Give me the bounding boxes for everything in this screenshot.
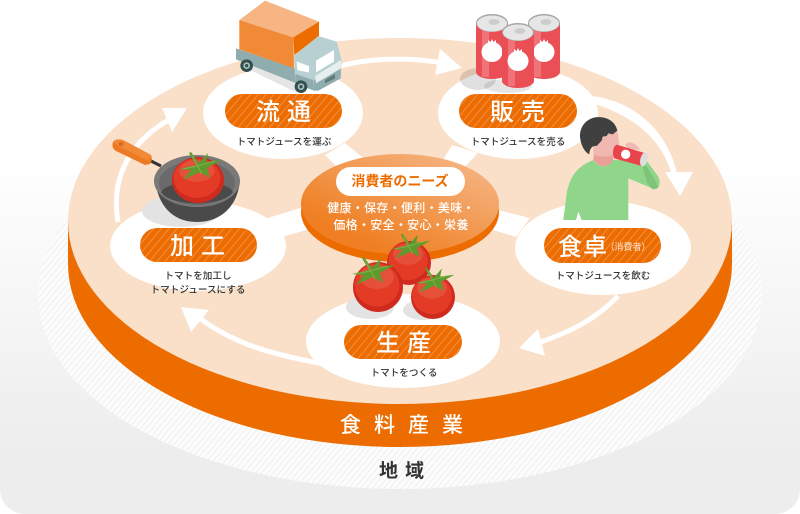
caption: dining table: トマトジュースを飲む xyxy=(556,270,650,282)
pill: distribution xyxy=(225,94,342,128)
center disc: consumer needs xyxy=(301,154,499,262)
arrow: retail to dining table xyxy=(593,96,693,196)
caption: production: トマトをつくる xyxy=(371,368,437,379)
food industry disc xyxy=(68,38,732,447)
region label: 地域 xyxy=(379,460,431,482)
caption: distribution: トマトジュースを運ぶ xyxy=(237,137,332,148)
icon: person drinking xyxy=(563,117,660,220)
node blob: production xyxy=(306,294,500,388)
node blob: distribution xyxy=(203,67,363,159)
needs list: 価格・安全・安心・栄養 xyxy=(333,217,469,232)
pill: processing xyxy=(140,228,257,262)
arrow: dining table to production xyxy=(519,296,618,356)
icon: truck xyxy=(236,1,343,93)
caption: processing: トマトを加工し xyxy=(164,271,232,282)
food industry label: 食料産業 xyxy=(340,414,476,437)
needs list: 健康・保存・便利・美味・ xyxy=(327,200,475,215)
node blob: retail xyxy=(438,67,598,159)
needs heading xyxy=(336,167,465,196)
pill: dining table xyxy=(544,228,661,263)
connector bands xyxy=(268,143,530,237)
node blob: dining table xyxy=(515,201,691,295)
needs list xyxy=(327,200,475,232)
arrow: production to processing xyxy=(181,307,324,364)
pill: production xyxy=(344,325,462,359)
cycle arrows xyxy=(116,49,693,364)
pill: production: 生産 xyxy=(376,330,438,357)
needs heading: 消費者のニーズ xyxy=(351,173,449,189)
icon: juice cans xyxy=(460,14,560,93)
pill: retail: 販売 xyxy=(490,99,552,126)
pill: dining table: 食卓 xyxy=(558,234,608,261)
caption: processing: トマトジュースにする xyxy=(151,285,245,296)
arrow: distribution to retail xyxy=(340,49,462,75)
icon: tomatoes xyxy=(346,234,455,320)
icon: pan with tomato xyxy=(112,139,240,227)
caption: retail: トマトジュースを売る xyxy=(471,136,565,148)
node blob: processing xyxy=(110,201,286,291)
pill: retail xyxy=(459,94,577,128)
arrow: processing to distribution xyxy=(116,108,187,222)
pill: dining table: （消費者） xyxy=(605,241,651,252)
caption: processing xyxy=(151,271,245,296)
pill: processing: 加工 xyxy=(170,233,232,260)
pill: distribution: 流通 xyxy=(256,99,318,126)
